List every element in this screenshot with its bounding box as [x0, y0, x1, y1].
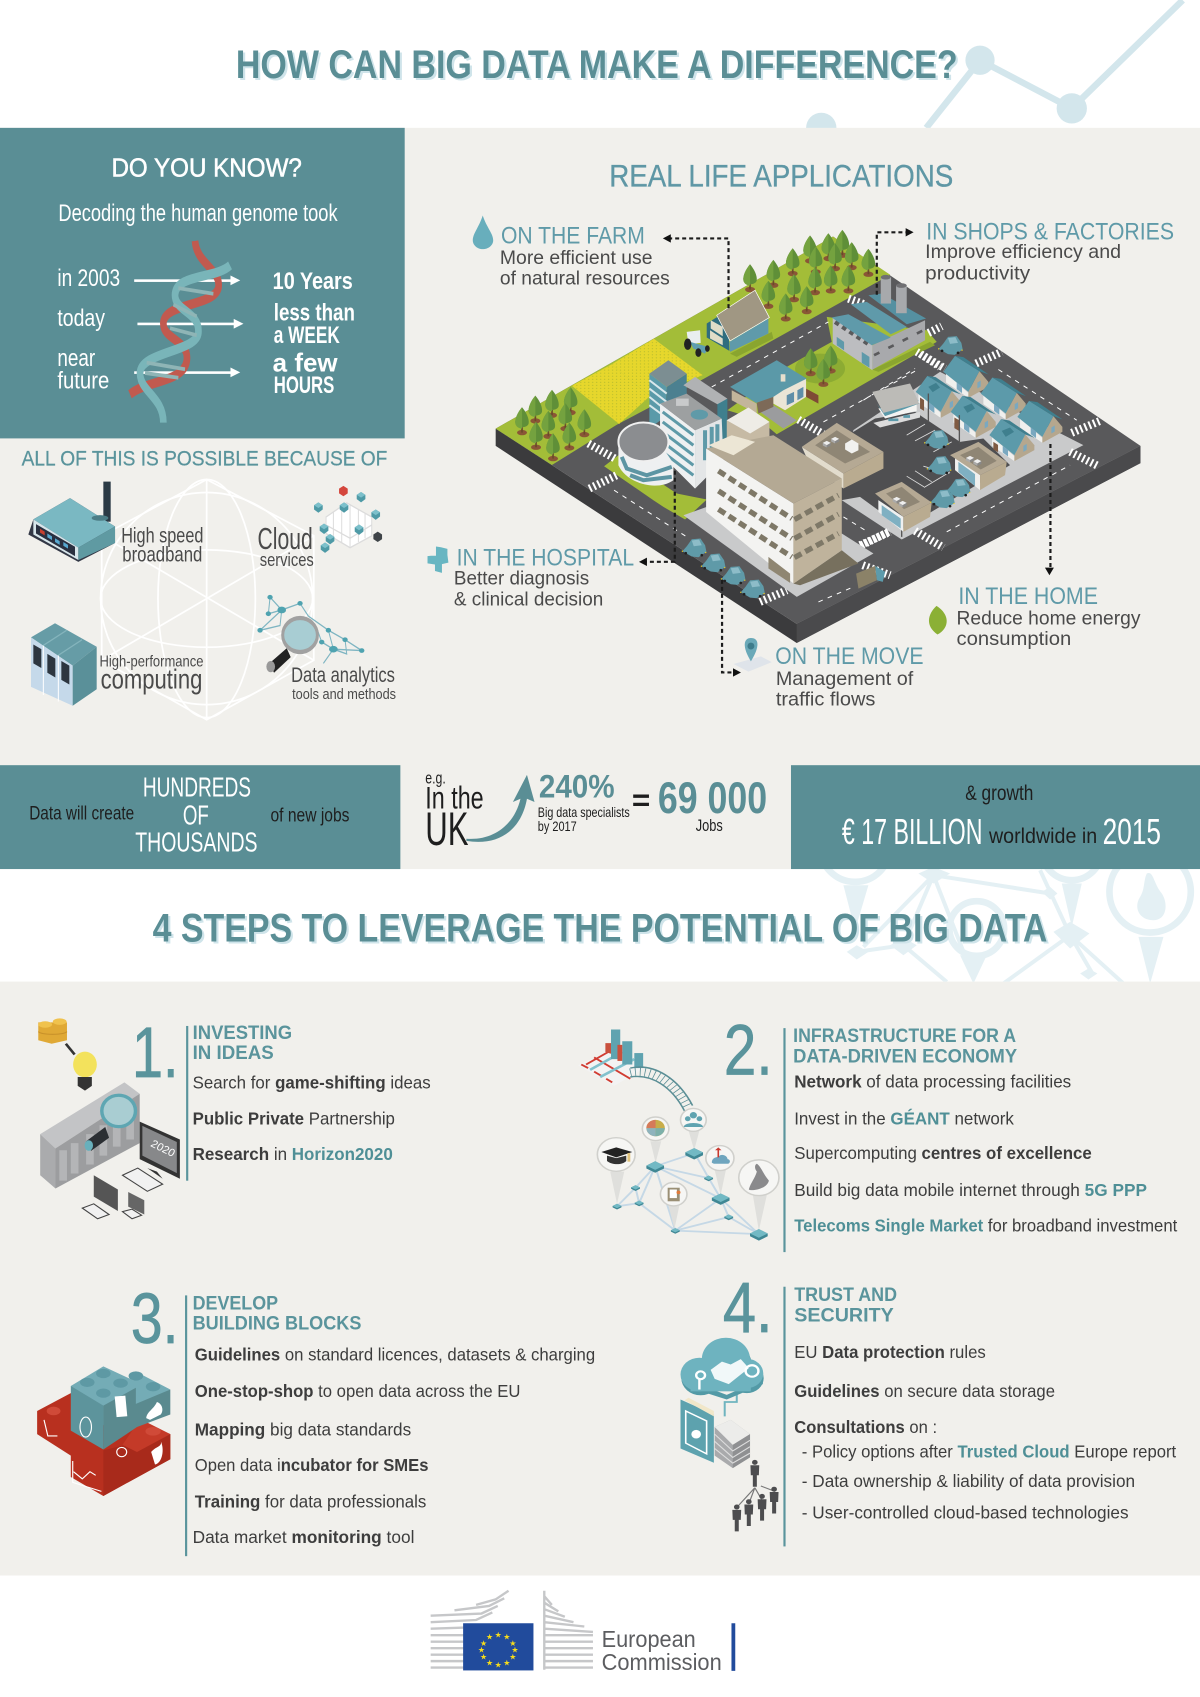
step number: 2.	[724, 1011, 773, 1091]
icon: medical cross	[428, 547, 448, 573]
labels: periods	[57, 265, 120, 395]
step actions: Research in Horizon2020	[193, 1144, 393, 1164]
icon: dna helix	[130, 241, 230, 423]
icon: servers	[31, 623, 97, 706]
step heading: TRUST AND	[794, 1284, 897, 1306]
step actions: Search for game-shifting ideas	[193, 1073, 431, 1093]
callout: home: IN THE HOME	[958, 583, 1098, 610]
step actions: Public Private Partnership	[193, 1108, 395, 1128]
step actions: Open data incubator for SMEs	[195, 1455, 429, 1475]
truck	[856, 566, 885, 589]
parked cars	[924, 336, 970, 508]
step actions: Telecoms Single Market for broadband investment	[794, 1216, 1177, 1236]
logo stars: ★	[495, 1630, 502, 1639]
stat: growth: & growth	[965, 780, 1033, 805]
arrow: growth	[466, 775, 535, 842]
stat: new jobs: OF	[183, 800, 209, 831]
step actions: - Policy options after Trusted Cloud Europe report	[802, 1442, 1176, 1462]
illustration: servers and computers: 2020	[148, 1138, 177, 1160]
parking bays	[907, 424, 952, 488]
step 1: investing in ideas	[38, 1013, 431, 1219]
callout: home: consumption	[957, 628, 1071, 650]
logo wordmark: Commission	[602, 1649, 722, 1675]
logo stars: ★	[509, 1639, 517, 1648]
stat: new jobs	[0, 765, 400, 869]
step actions	[193, 1344, 595, 1547]
step actions: Network of data processing facilities	[794, 1072, 1071, 1092]
logo wordmark	[602, 1626, 722, 1675]
step actions: One-stop-shop to open data across the EU	[195, 1381, 520, 1401]
logo stars: ★	[486, 1632, 493, 1641]
blue tower	[649, 374, 667, 429]
icon: router	[28, 482, 115, 562]
stat: UK specialists: Big data specialists	[538, 804, 630, 820]
step heading	[193, 1022, 292, 1064]
lawn	[727, 317, 937, 434]
step actions: Mapping big data standards	[195, 1420, 411, 1440]
label: computing	[100, 654, 204, 694]
step heading: BUILDING BLOCKS	[193, 1312, 361, 1334]
step actions	[794, 1072, 1177, 1236]
step heading: SECURITY	[794, 1304, 894, 1326]
callout: shops and factories: Improve efficiency and	[925, 241, 1121, 263]
stat: growth: worldwide in	[988, 823, 1097, 848]
panel: enablers	[22, 447, 396, 720]
hospital and main building block	[588, 408, 890, 602]
wireframe sphere background	[101, 480, 314, 720]
title: HOW CAN BIG DATA MAKE A DIFFERENCE?	[236, 43, 958, 87]
callout: on the move: traffic flows	[776, 689, 876, 711]
watermark network	[824, 869, 1194, 982]
labels: periods: future	[57, 368, 109, 395]
tan annex	[802, 423, 883, 489]
step heading	[793, 1025, 1017, 1068]
stat: growth: € 17 BILLION	[842, 812, 983, 852]
step actions: Invest in the GÉANT network	[794, 1107, 1014, 1128]
heading: do you know: DO YOU KNOW?	[111, 153, 302, 183]
step 3: building blocks	[37, 1279, 595, 1556]
callout: home	[957, 583, 1141, 650]
road markings	[863, 368, 1077, 532]
stat: UK specialists: 69 000	[658, 774, 767, 823]
stat: UK specialists	[425, 769, 767, 856]
icon: water drop	[473, 215, 493, 249]
label: computing: High-performance	[100, 654, 204, 671]
labels: periods: today	[57, 305, 105, 332]
step actions: - User-controlled cloud-based technologies	[802, 1502, 1129, 1522]
stat: growth	[791, 765, 1200, 869]
road cars	[682, 539, 765, 598]
step actions: - Data ownership & liability of data provision	[802, 1471, 1135, 1491]
stat: UK specialists: e.g.	[425, 770, 446, 788]
hospital towers	[649, 360, 727, 489]
step heading: DATA-DRIVEN ECONOMY	[793, 1046, 1017, 1068]
callout: on the farm: of natural resources	[500, 268, 670, 290]
label: cloud: Cloud	[258, 523, 313, 556]
label: cloud: services	[260, 549, 314, 570]
step number: 1.	[132, 1013, 179, 1093]
grey block	[717, 399, 727, 444]
callout: hospital	[454, 545, 634, 610]
stat: UK specialists: UK	[425, 803, 469, 856]
back row houses	[943, 356, 1063, 443]
road markings	[614, 490, 865, 602]
left tree grove	[515, 387, 591, 461]
logo wordmark: European	[602, 1626, 696, 1652]
footer	[0, 1576, 1200, 1697]
step heading: INFRASTRUCTURE FOR A	[793, 1025, 1016, 1047]
right district	[840, 336, 1102, 548]
arrow: hospital	[639, 471, 675, 566]
arrow: shops	[877, 228, 914, 295]
callout: hospital: Better diagnosis	[454, 567, 589, 589]
step actions: Guidelines on standard licences, datasets & charging	[195, 1344, 595, 1364]
round building	[618, 423, 673, 486]
labels: durations: a few	[273, 347, 338, 377]
factory	[832, 275, 935, 372]
logo stars: ★	[486, 1658, 493, 1667]
label: data analytics: tools and methods	[292, 686, 396, 703]
step actions	[794, 1342, 1176, 1522]
callout: on the move: ON THE MOVE	[775, 643, 924, 670]
logo: european commission	[431, 1591, 735, 1675]
heading: all of this is possible: ALL OF THIS IS POSSIBLE BECAUSE OF	[22, 447, 387, 470]
tan shops	[875, 442, 1007, 532]
text: decoding: Decoding the human genome took	[58, 200, 338, 227]
icon: data analytics	[257, 595, 364, 673]
step heading	[193, 1292, 361, 1334]
logo stars: ★	[509, 1653, 517, 1662]
arrows and icons layer	[428, 215, 1054, 677]
upper district	[515, 230, 942, 461]
heading: real life applications: REAL LIFE APPLICATIONS	[609, 158, 953, 193]
labels: durations	[273, 268, 355, 399]
step heading: IN IDEAS	[193, 1042, 274, 1064]
front row houses	[916, 376, 1035, 461]
icon: leaf	[929, 606, 947, 635]
parking asphalt	[840, 412, 1010, 529]
step actions: EU Data protection rules	[794, 1342, 986, 1362]
logo flag	[463, 1623, 533, 1670]
label: cloud	[258, 523, 314, 570]
title: HOW CAN BIG DATA MAKE A DIFFERENCE?	[238, 45, 960, 89]
stat: new jobs: Data will create	[29, 802, 134, 824]
logo stars: ★	[503, 1658, 511, 1667]
callout: on the farm: ON THE FARM	[501, 223, 645, 250]
step actions: Build big data mobile internet through 5G PPP	[794, 1180, 1147, 1200]
labels: periods: near	[57, 345, 95, 372]
isometric city illustration	[428, 215, 1140, 677]
crosswalks	[798, 299, 942, 434]
logo stars: ★	[478, 1645, 485, 1654]
lawn	[604, 455, 707, 520]
pavement	[683, 507, 873, 597]
stat: UK specialists: by 2017	[538, 818, 577, 834]
lawn trees	[795, 346, 845, 387]
callout: on the move: Management of	[776, 668, 914, 690]
label: broadband	[121, 524, 203, 567]
stats banner	[0, 765, 1200, 869]
step actions: Training for data professionals	[195, 1491, 426, 1511]
background chart decoration	[806, 0, 1183, 143]
panel: real life applications	[428, 158, 1174, 711]
callout: on the farm: More efficient use	[500, 247, 652, 269]
logo building stripes	[431, 1591, 593, 1670]
road markings	[712, 322, 828, 387]
step heading	[794, 1284, 897, 1326]
crosswalks	[588, 444, 890, 602]
logo stars: ★	[511, 1645, 519, 1654]
label: data analytics	[291, 662, 396, 703]
labels: durations: HOURS	[274, 372, 334, 399]
callout: on the move	[775, 643, 924, 711]
barn	[707, 290, 773, 357]
step number: 4.	[723, 1268, 773, 1348]
stat: UK specialists: In the	[425, 780, 484, 815]
arrow: home	[1045, 444, 1054, 575]
arrows	[134, 276, 243, 377]
callout: on the farm	[500, 223, 670, 290]
labels: durations: less than	[274, 299, 355, 326]
logo stars: ★	[503, 1632, 511, 1641]
logo stars: ★	[480, 1639, 487, 1648]
building shadow	[793, 550, 858, 585]
step actions: Supercomputing centres of excellence	[794, 1143, 1092, 1163]
callout: hospital: IN THE HOSPITAL	[457, 545, 634, 572]
step actions: Guidelines on secure data storage	[794, 1381, 1055, 1401]
step heading: INVESTING	[193, 1022, 292, 1044]
panel: do you know	[0, 128, 405, 438]
city base	[496, 237, 1140, 643]
illustration: cloud, book and people	[681, 1338, 779, 1531]
illustration: servers and computers	[38, 1018, 180, 1219]
upper tree grove	[743, 230, 875, 322]
stat: UK specialists: =	[632, 785, 650, 818]
callout: hospital: & clinical decision	[454, 588, 603, 610]
label: data analytics: Data analytics	[291, 662, 395, 687]
tractor	[684, 330, 710, 357]
stat: UK specialists: 240%	[539, 769, 615, 805]
labels: periods: in 2003	[57, 265, 120, 292]
lamp posts	[902, 393, 959, 537]
stat: UK specialists: Jobs	[696, 817, 723, 835]
label: computing: computing	[101, 663, 202, 694]
arrow: farm	[663, 234, 729, 308]
callout: shops and factories	[925, 218, 1174, 284]
main building	[706, 408, 842, 584]
arrow: move	[722, 580, 741, 677]
illustration: network map	[578, 1029, 779, 1241]
heading: 4 steps: 4 STEPS TO LEVERAGE THE POTENTIAL OF BIG DATA	[153, 907, 1047, 951]
stat: new jobs: of new jobs	[271, 804, 350, 826]
step actions: Data market monitoring tool	[193, 1527, 414, 1547]
white band	[0, 869, 1200, 982]
stat: growth: 2015	[1103, 812, 1161, 852]
heading: 4 steps: 4 STEPS TO LEVERAGE THE POTENTIAL OF BIG DATA	[155, 909, 1050, 953]
stat: new jobs: THOUSANDS	[135, 827, 258, 858]
logo stars	[478, 1630, 519, 1670]
crosswalks	[860, 352, 1102, 548]
stat: new jobs: HUNDREDS	[143, 772, 251, 803]
step actions	[193, 1073, 431, 1164]
icon: cloud data cube	[314, 486, 382, 553]
callout: shops and factories: productivity	[925, 262, 1030, 284]
labels: durations: a WEEK	[274, 322, 340, 349]
label: broadband: broadband	[122, 544, 202, 567]
callout: home: Reduce home energy	[957, 608, 1141, 630]
step 2: infrastructure	[578, 1011, 1177, 1252]
step 4: trust and security	[681, 1268, 1176, 1546]
logo stars: ★	[495, 1661, 502, 1670]
lot pavement	[842, 372, 1083, 540]
logo stars: ★	[480, 1653, 487, 1662]
labels: durations: 10 Years	[273, 268, 353, 295]
label: broadband: High speed	[121, 524, 203, 547]
step heading: DEVELOP	[193, 1292, 278, 1314]
step number: 3.	[131, 1279, 179, 1359]
shop	[872, 383, 920, 427]
house	[730, 360, 818, 429]
icon: location pin	[733, 638, 772, 672]
illustration: building blocks	[37, 1366, 170, 1496]
white tower	[660, 404, 695, 489]
step actions: Consultations on :	[794, 1417, 937, 1437]
